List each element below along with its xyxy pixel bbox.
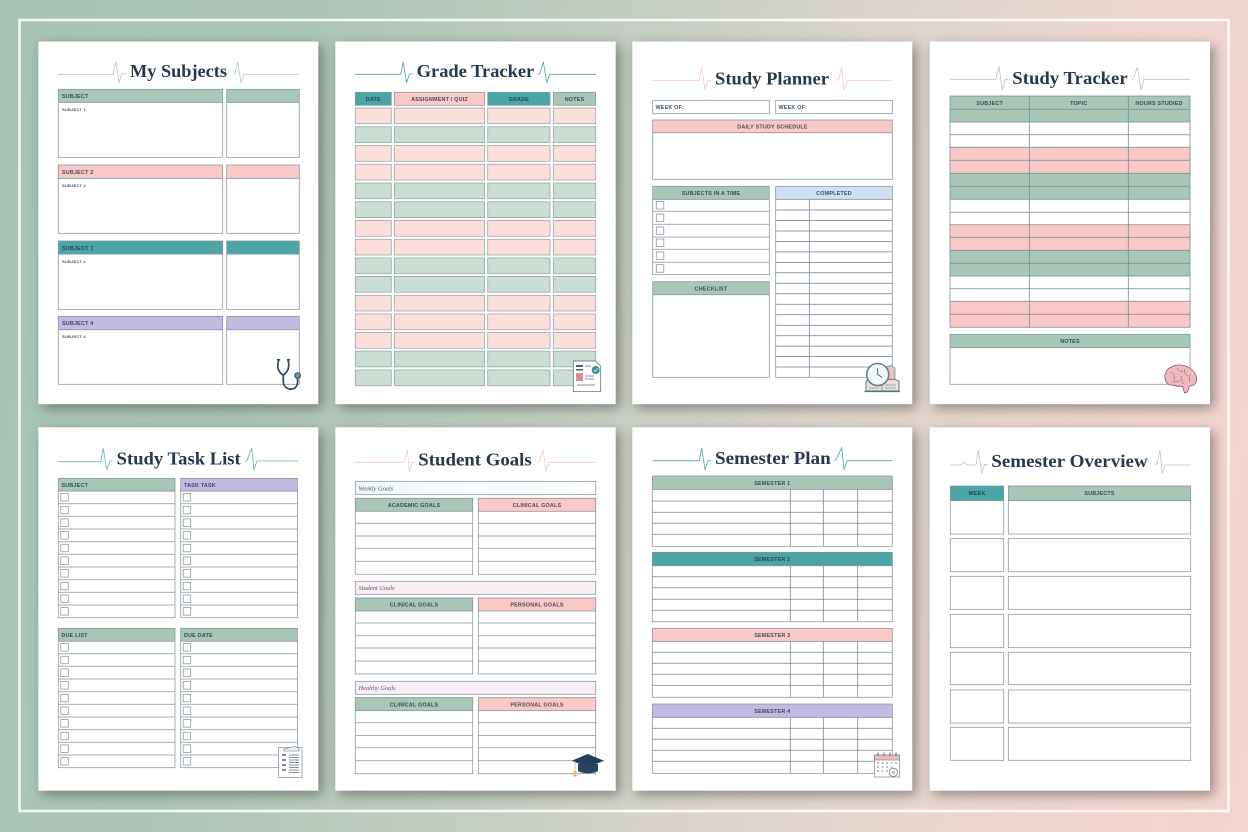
goal section 3 xyxy=(355,681,596,774)
table header: NOTES xyxy=(565,97,584,103)
panel: Study Tracker xyxy=(930,42,1210,404)
study tracker table: TOPIC xyxy=(1070,101,1087,107)
task block: due list xyxy=(58,628,175,768)
subject 2 block: SUBJECT 2 xyxy=(62,170,93,176)
task block: task: TASK TASK xyxy=(184,483,216,489)
notes box xyxy=(950,334,1190,384)
panel: Grade Tracker xyxy=(335,42,616,404)
week of fields: WEEK OF: xyxy=(656,105,684,111)
subjects column header xyxy=(1008,486,1191,501)
subject 3 block: SUBJECT 4 xyxy=(62,259,86,264)
subject 1 block: SUBJECT 1 xyxy=(62,107,86,112)
title: My Subjects: My Subjects xyxy=(130,61,227,81)
task block: subject: SUBJECT xyxy=(62,483,89,489)
title: Semester Plan: Semester Plan xyxy=(715,448,831,468)
panel: Semester Plan xyxy=(632,427,912,791)
goal section 1: ACADEMIC GOALS xyxy=(388,503,440,509)
title: Semester Overview: Semester Overview xyxy=(991,451,1148,471)
subject 3 block: SUBJECT 3 xyxy=(62,246,93,252)
goal section 2: CLINICAL GOALS xyxy=(390,603,438,609)
heartbeat line xyxy=(653,448,892,470)
icon: clipboard checklist xyxy=(278,746,302,778)
panel: Study Task List xyxy=(38,427,318,791)
goal section 1: CLINICAL GOALS xyxy=(513,503,561,509)
subjects checklist: SUBJECTS IN A TIME xyxy=(682,191,741,197)
panel: Semester Overview xyxy=(930,427,1210,791)
semester 1 table: SEMESTER 1 xyxy=(754,481,790,487)
heartbeat line xyxy=(355,449,596,472)
goal section 3: Healthy Goals xyxy=(358,685,396,692)
daily study schedule: DAILY STUDY SCHEDULE xyxy=(737,124,808,130)
subject 1 block xyxy=(58,89,299,157)
checklist notes box: CHECKLIST xyxy=(695,286,728,292)
week of fields: WEEK OF: xyxy=(778,105,807,111)
icon: calendar xyxy=(874,752,900,777)
heartbeat line xyxy=(58,62,299,83)
table header: GRADE xyxy=(509,97,529,103)
task block: subject xyxy=(58,478,175,618)
semester 3 table xyxy=(652,628,892,697)
panel: Student Goals xyxy=(335,427,616,791)
title: Student Goals: Student Goals xyxy=(418,450,532,470)
subject 4 block xyxy=(58,316,299,384)
checklist notes box xyxy=(653,282,769,377)
completed table: COMPLETED xyxy=(816,191,852,197)
icon: clock and open book xyxy=(864,364,900,392)
heartbeat line xyxy=(652,67,892,90)
semester 4 table xyxy=(652,704,892,773)
subjects checklist xyxy=(653,186,769,275)
table header: ASSIGNMENT / QUIZ xyxy=(411,97,468,103)
task block: due date xyxy=(181,628,297,768)
subject 2 block xyxy=(58,165,299,233)
goal section 1 xyxy=(355,481,596,574)
table header xyxy=(355,92,596,105)
subject 4 block: SUBJECT 4 xyxy=(62,334,86,339)
table header: DATE xyxy=(366,97,381,103)
goal section 3: CLINICAL GOALS xyxy=(390,702,438,708)
week column header: WEEK xyxy=(969,491,985,497)
heartbeat line xyxy=(950,450,1191,473)
daily study schedule xyxy=(653,120,892,179)
goal section 3: PERSONAL GOALS xyxy=(510,702,564,708)
semester 1 table xyxy=(652,476,892,546)
task block: task xyxy=(181,478,297,618)
title: Study Tracker: Study Tracker xyxy=(1012,68,1128,88)
notes box: NOTES xyxy=(1060,339,1080,345)
table rows xyxy=(355,108,596,386)
panel: Study Planner xyxy=(632,42,912,404)
week rows xyxy=(950,501,1191,760)
icon: brain xyxy=(1165,365,1197,393)
icon: stethoscope xyxy=(278,360,300,389)
subject 3 block xyxy=(58,241,299,309)
panel: My Subjects xyxy=(38,42,318,404)
subject 2 block: SUBJECT 2 xyxy=(62,183,86,188)
subject 1 block: SUBJECT xyxy=(62,94,89,100)
heartbeat line xyxy=(950,67,1190,90)
goal section 2: Student Goals xyxy=(358,585,395,592)
icon: graduation cap xyxy=(572,754,604,776)
semester 2 table: SEMESTER 2 xyxy=(754,557,790,563)
heartbeat line xyxy=(58,448,298,470)
title: Grade Tracker: Grade Tracker xyxy=(417,61,534,81)
title: Study Task List: Study Task List xyxy=(117,448,241,468)
title: Study Planner: Study Planner xyxy=(715,68,829,88)
subject 4 block: SUBJECT 4 xyxy=(62,321,93,327)
semester 3 table: SEMESTER 3 xyxy=(754,633,790,639)
heartbeat line xyxy=(355,62,596,83)
study tracker table: SUBJECT xyxy=(976,101,1003,107)
semester 4 table: SEMESTER 4 xyxy=(754,709,790,715)
icon: graded report xyxy=(573,361,601,392)
study tracker table: HOURS STUDIED xyxy=(1135,101,1183,107)
subjects column header: SUBJECTS xyxy=(1084,491,1115,497)
completed table xyxy=(776,186,892,377)
semester 2 table xyxy=(652,552,892,622)
task block: due list: DUE LIST xyxy=(62,633,88,639)
goal section 2 xyxy=(355,581,596,674)
study tracker table xyxy=(950,96,1190,327)
task block: due date: DUE DATE xyxy=(184,633,213,639)
goal section 2: PERSONAL GOALS xyxy=(510,603,564,609)
week column header xyxy=(950,486,1004,501)
week of fields xyxy=(653,100,892,114)
goal section 1: Weekly Goals xyxy=(358,486,394,492)
